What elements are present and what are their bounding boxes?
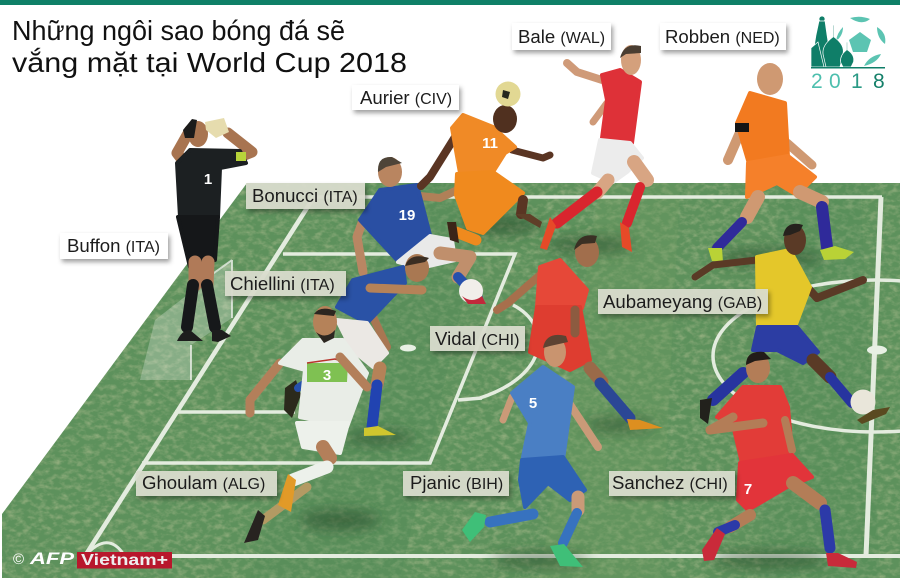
player: Sanchez: 7	[744, 481, 752, 498]
player: Vidal	[497, 235, 663, 430]
player: Buffon: 1	[204, 171, 212, 188]
label: Ghoulam: Ghoulam (ALG)	[142, 472, 265, 493]
label: Sanchez: Sanchez (CHI)	[612, 472, 728, 493]
player: Sanchez	[702, 352, 857, 568]
credit: AFP Vietnam+: AFP	[29, 549, 75, 568]
football pitch	[0, 183, 900, 578]
player: Bonucci: 19	[399, 207, 415, 224]
player: Buffon	[177, 118, 252, 342]
label: Bonucci: Bonucci (ITA)	[252, 185, 358, 206]
credit: AFP Vietnam+: ©	[13, 551, 24, 568]
player: Aubameyang	[695, 224, 890, 424]
credit: AFP Vietnam+	[13, 549, 172, 569]
title	[12, 15, 407, 78]
player: Bale	[540, 45, 647, 252]
player: Pjanic: 5	[529, 395, 537, 412]
label: Aurier: Aurier (CIV)	[360, 87, 452, 108]
player: Pjanic	[462, 335, 598, 567]
label: Chiellini: Chiellini (ITA)	[230, 273, 335, 294]
logo year	[811, 70, 885, 93]
label: Aubameyang: Aubameyang (GAB)	[603, 291, 762, 312]
player: Bonucci	[357, 157, 486, 304]
goal	[140, 260, 232, 380]
player: Robben	[708, 63, 854, 262]
title: Những ngôi sao bóng đá sẽ	[12, 15, 345, 46]
top bar	[0, 0, 900, 5]
label: Bale	[512, 23, 611, 50]
World Cup 2018 logo	[811, 16, 885, 93]
player: Ghoulam: 3	[323, 367, 331, 384]
label: Pjanic: Pjanic (BIH)	[410, 472, 503, 493]
player: Ghoulam	[244, 306, 367, 543]
logo year: 1	[851, 70, 863, 93]
player: Chiellini	[284, 254, 429, 436]
player shadows	[300, 215, 830, 568]
logo year: 2	[811, 70, 823, 93]
player: Aurier	[421, 82, 550, 243]
icon: football	[836, 17, 885, 66]
label: Robben: Robben (NED)	[665, 26, 780, 47]
logo year: 8	[873, 70, 885, 93]
logo year: 0	[829, 70, 841, 93]
credit: AFP Vietnam+: Vietnam+	[81, 552, 168, 569]
player: Aurier: 11	[482, 135, 498, 152]
label: Vidal: Vidal (CHI)	[435, 328, 519, 349]
icon: Moscow domes	[811, 16, 854, 67]
title: vắng mặt tại World Cup 2018	[12, 47, 407, 78]
label: Buffon: Buffon (ITA)	[67, 235, 160, 256]
label: Bale: Bale (WAL)	[518, 26, 605, 47]
label: Buffon	[60, 233, 168, 259]
